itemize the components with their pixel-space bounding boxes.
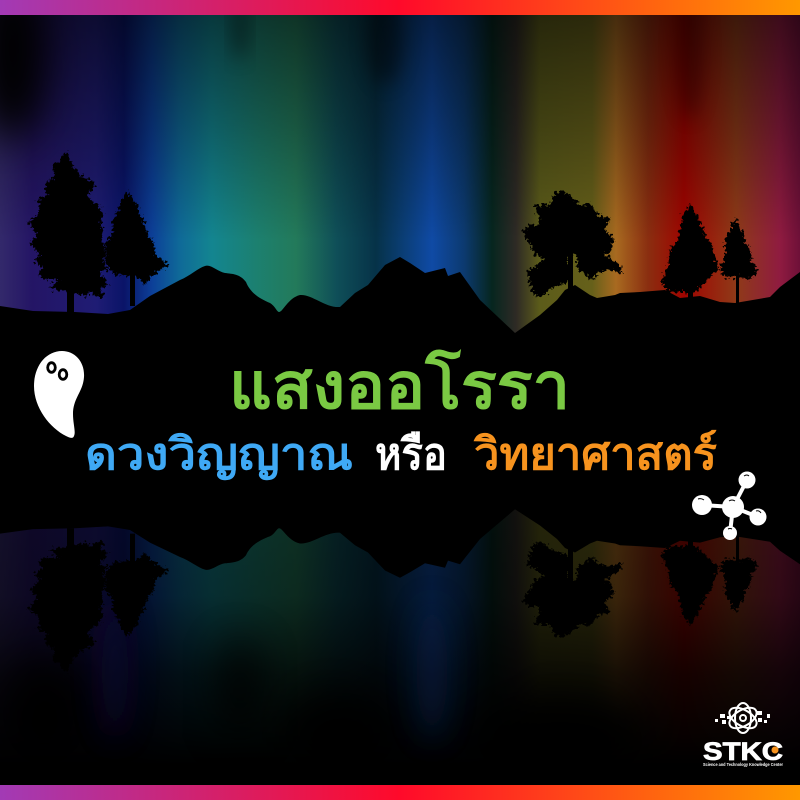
top gradient bar <box>0 0 800 15</box>
center black band <box>0 340 800 505</box>
subtitle: or: หรือ <box>375 430 447 479</box>
icon: ghost <box>34 351 84 438</box>
logo dot <box>772 746 778 754</box>
bottom gradient bar <box>0 785 800 800</box>
logo wordmark: STKC <box>703 738 783 766</box>
aurora reflection <box>0 490 800 785</box>
logo dots <box>715 711 770 724</box>
subtitle: spirit: ดวงวิญญาณ <box>85 430 353 480</box>
reflected landscape <box>0 492 800 672</box>
logo: STKC <box>703 703 783 767</box>
aurora sky <box>0 0 800 355</box>
title: แสงออโรรา <box>229 348 570 422</box>
icon: molecule <box>692 472 766 540</box>
subtitle: science: วิทยาศาสตร์ <box>473 429 717 479</box>
landscape silhouette <box>0 152 800 352</box>
logo tagline: Science and Technology Knowledge Center <box>703 762 783 767</box>
logo atom <box>726 703 760 733</box>
